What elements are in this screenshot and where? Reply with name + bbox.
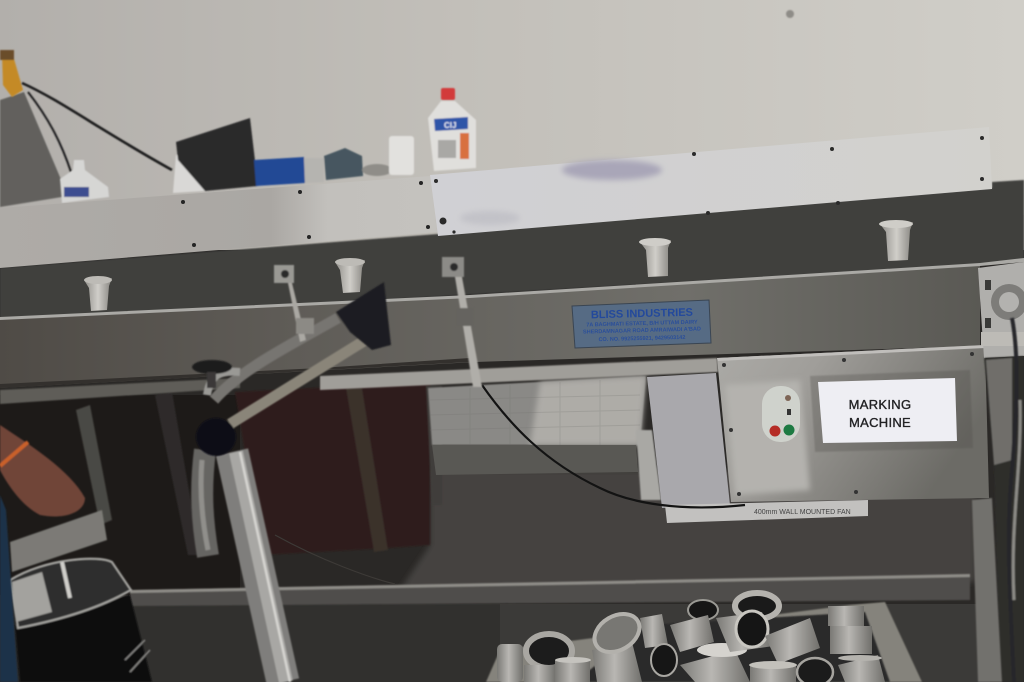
blue nameplate: Bliss Industries: SHERDAMNAGAR ROAD AMRAIWADI A'BAD — [583, 326, 701, 336]
white box left — [10, 510, 107, 572]
bottom horizontal steel bar — [130, 574, 970, 606]
adjustment bracket right — [442, 257, 482, 387]
dark housing at left of wall — [0, 92, 68, 207]
white cylinder — [389, 136, 414, 175]
label: marking machine: MARKING — [849, 397, 911, 412]
right foil leg — [972, 498, 1002, 682]
back dark band — [0, 180, 1024, 322]
tall white bottle — [428, 88, 476, 171]
blue nameplate: Bliss Industries: BLISS INDUSTRIES — [591, 307, 693, 321]
right side device with gauge — [978, 262, 1024, 358]
horizontal steel strip — [320, 358, 718, 390]
wall cables — [22, 83, 172, 172]
shelf plate left — [0, 176, 437, 268]
crate — [486, 602, 922, 682]
tall white bottle: CIJ — [444, 121, 456, 130]
black arm bracket — [336, 282, 391, 350]
control switch with red and green buttons — [762, 386, 800, 442]
blue box — [254, 157, 324, 186]
cups — [497, 606, 885, 682]
label: marking machine — [818, 378, 957, 443]
small white bottle — [60, 160, 109, 203]
fan label: 400mm WALL MOUNTED FAN — [754, 509, 851, 516]
black box — [176, 118, 258, 191]
grey sheet — [647, 373, 730, 508]
shelf plate right — [430, 127, 992, 236]
control panel — [717, 345, 989, 502]
white cloth — [173, 155, 205, 193]
orange connector — [0, 50, 23, 97]
wall background — [0, 0, 1024, 215]
left shelf strip — [0, 378, 240, 404]
foil strip — [636, 430, 661, 500]
blue nameplate: Bliss Industries — [572, 300, 711, 348]
metal bowl on black bucket — [10, 559, 152, 682]
plastic crate with metal cups — [486, 593, 922, 682]
wall mark — [786, 10, 794, 18]
upper arm hose — [214, 318, 338, 400]
right lower frame and cables — [984, 318, 1024, 682]
dispensing pipe wrapped in foil — [232, 452, 290, 682]
lower machine interior background — [0, 250, 1024, 682]
adjustment bracket left — [274, 265, 314, 342]
label: marking machine: MACHINE — [849, 415, 911, 430]
teal container — [324, 148, 363, 180]
stainless machine body — [0, 258, 1024, 388]
shelf items — [60, 88, 476, 203]
operator hand at left — [0, 425, 85, 516]
rear rings — [688, 600, 718, 620]
black cable — [482, 385, 745, 507]
blue nameplate: Bliss Industries: 7A BAGHMATI ESTATE, B/H UTTAM DAIRY — [586, 320, 698, 328]
brown back panel — [235, 382, 430, 555]
metal parts — [362, 164, 392, 176]
lower arm rod and fittings — [192, 336, 372, 456]
vertical posts behind arm — [76, 386, 442, 555]
blue nameplate: Bliss Industries: CO. NO. 9925255921, 9429503142 — [598, 335, 685, 343]
mounting knobs — [84, 220, 913, 311]
hose loop wrapped in foil — [201, 450, 208, 556]
silver foil panel — [428, 376, 646, 475]
fan label — [665, 500, 868, 523]
blue sleeve at far left — [0, 495, 18, 682]
thin cable lower — [275, 535, 395, 584]
